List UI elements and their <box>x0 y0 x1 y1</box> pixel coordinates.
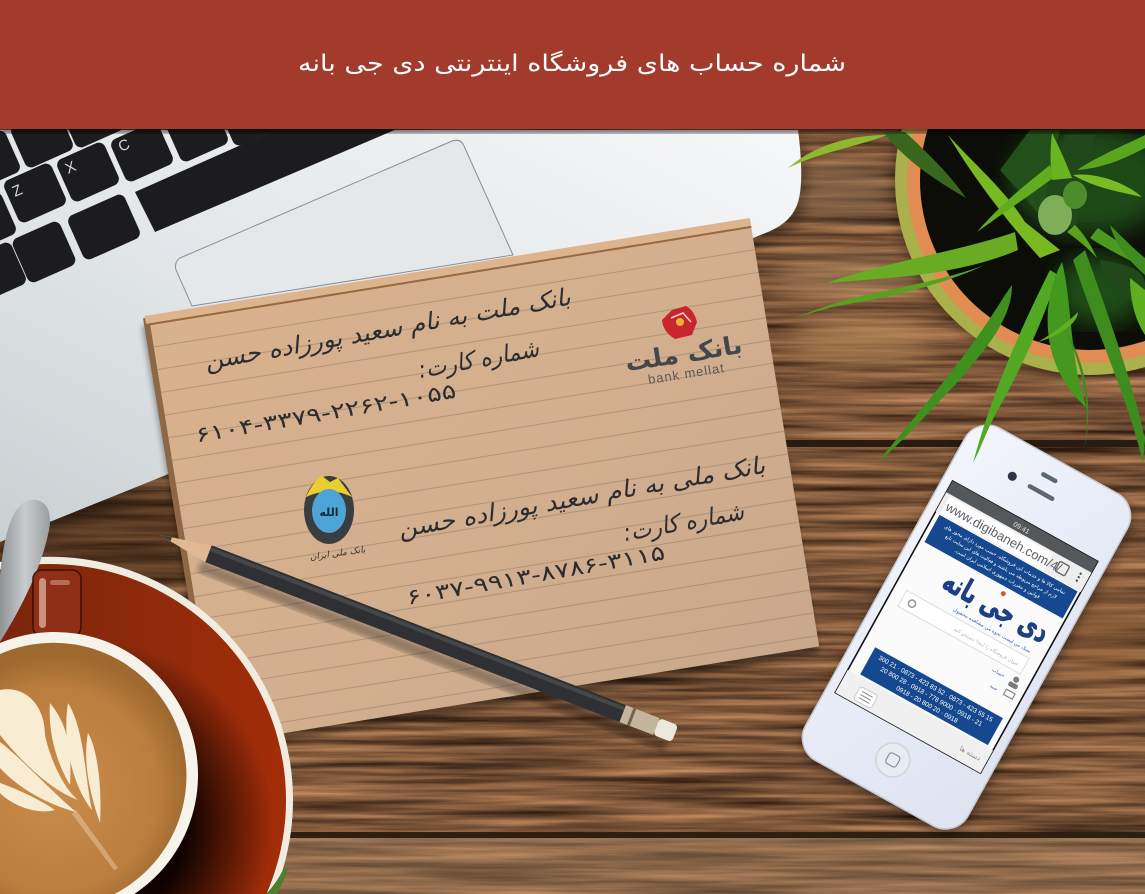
earpiece <box>1027 468 1063 502</box>
contact band: 300 21 · 0873 - 423 83 52 · 0873 - 423 55 15 <box>877 655 994 724</box>
handwriting: card number label 2: شماره کارت: <box>621 497 747 547</box>
laptop body <box>0 84 807 550</box>
plant centre bud <box>1038 181 1087 235</box>
search box <box>898 590 1029 674</box>
screen: 09:41 <box>1012 521 1030 536</box>
logo: bank melli: الله <box>319 506 339 519</box>
header banner <box>0 0 1145 129</box>
bottom navigation: دسته ها <box>958 745 982 763</box>
home button <box>870 737 916 783</box>
handwriting: bank melli name: بانک ملی به نام سعید پورزاده حسن <box>396 451 768 543</box>
account links: حساب <box>991 667 1006 679</box>
background foliage <box>1000 125 1145 325</box>
screen: لازم از مراجع مربوطه می باشند و فعالیت های این سایت تابع <box>944 534 1058 601</box>
camera <box>1006 470 1018 482</box>
leaves <box>788 132 1145 463</box>
cup rim <box>0 632 198 894</box>
search box: عنوان فروشگاه را اینجا جستجو کنید <box>952 625 1021 668</box>
contact band: 0918 - 20 800 20 · 0918 <box>895 685 959 725</box>
site tagline: سبک من لیست نحوه من مشاهده محصول <box>952 607 1032 655</box>
paper sheet with ruled lines <box>143 218 819 745</box>
handwriting: card number 1: ۶۱۰۴-۳۳۷۹-۲۲۶۲-۱۰۵۵ <box>194 379 458 447</box>
handwriting: bank mellat name: بانک ملت به نام سعید پورزاده حسن <box>203 283 573 375</box>
contact band: 20 800 28 · 0918 - 778 9000 · 0918 - 21 <box>879 666 984 728</box>
logo: bank melli <box>304 476 367 563</box>
logo: bank mellat <box>623 306 744 387</box>
keyboard keys <box>0 84 397 304</box>
coffee surface <box>0 643 186 894</box>
logo: bank mellat: بانک ملت <box>623 330 744 377</box>
notebook <box>142 218 819 754</box>
screen: www.digibaneh.com/4/ <box>942 499 1065 576</box>
contact band <box>860 647 1003 745</box>
trackpad <box>176 140 513 306</box>
screen <box>835 481 1098 773</box>
bottom navigation <box>835 670 993 773</box>
account links: سبد <box>988 683 998 692</box>
key legends: Z <box>10 181 25 201</box>
screen: قوانین و مقررات جمهوری اسلامی ایران است. <box>953 548 1041 601</box>
phone body <box>793 416 1140 838</box>
potted plant <box>788 0 1145 463</box>
screen: تمامی کالا ها و خدمات این فروشگاه، حسب مورد دارای مجوز های <box>943 523 1067 596</box>
spoon <box>0 500 50 642</box>
coffee cup and saucer <box>0 500 293 894</box>
key legends: X <box>63 158 79 178</box>
smartphone <box>791 416 1143 843</box>
latte art <box>0 689 118 870</box>
site logo: دی جی بانه <box>937 564 1055 651</box>
account links <box>983 665 1023 701</box>
handwriting: card number 2: ۶۰۳۷-۹۹۱۳-۸۷۸۶-۳۱۱۵ <box>405 541 667 610</box>
header shadow <box>0 126 1145 133</box>
status bar <box>946 481 1098 573</box>
handwriting: card number label 1: شماره کارت: <box>416 334 542 384</box>
pot <box>892 0 1145 378</box>
logo: bank mellat: bank mellat <box>647 360 726 387</box>
pencil <box>152 527 678 753</box>
key legends <box>10 136 133 201</box>
key legends: C <box>116 136 133 156</box>
title: شماره حساب های فروشگاه اینترنتی دی جی بانه <box>298 50 846 77</box>
notice banner <box>924 515 1078 619</box>
phone shadow <box>794 421 1141 843</box>
address bar <box>936 492 1091 592</box>
logo: bank melli: بانک ملی ایران <box>309 545 367 563</box>
notebook shadow <box>142 228 819 754</box>
saucer <box>0 557 293 894</box>
cup handle <box>33 570 81 636</box>
